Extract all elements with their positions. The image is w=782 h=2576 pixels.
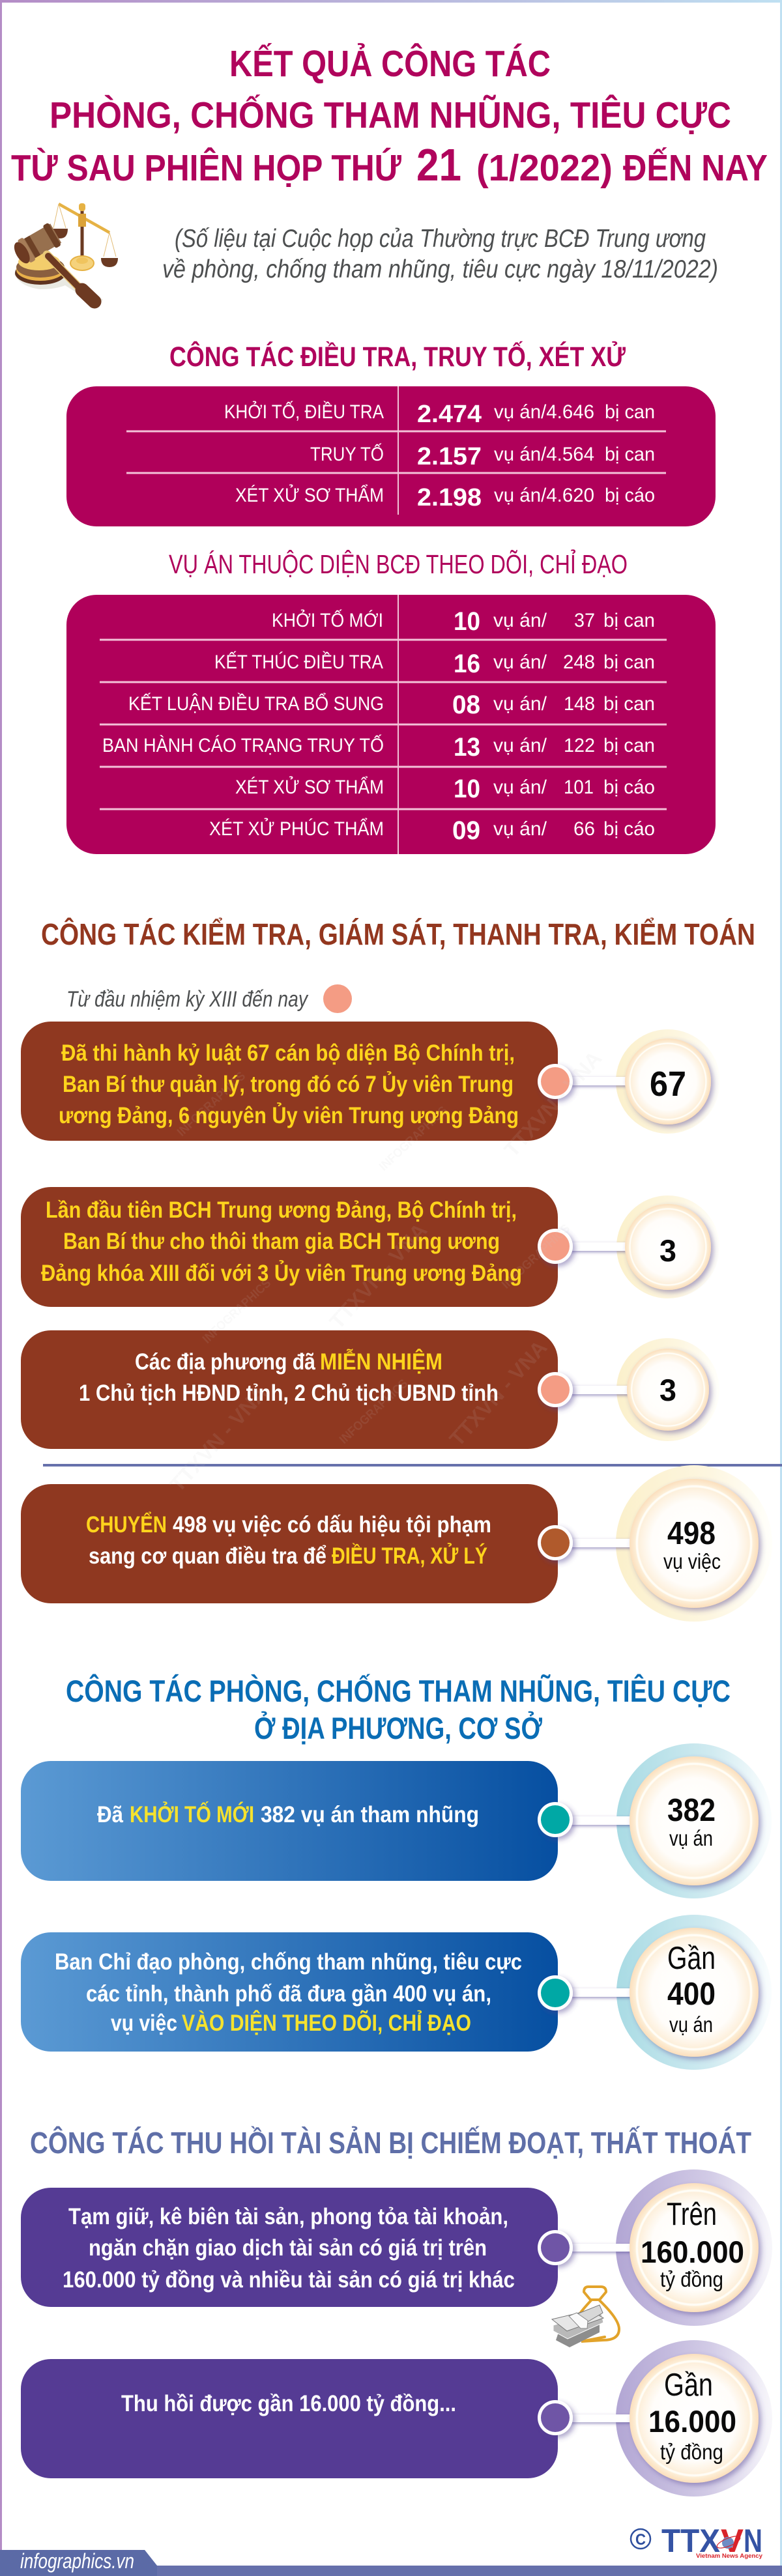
- row 4: bị can: [603, 735, 655, 756]
- icon: money bag and cash: [552, 2287, 619, 2347]
- card: discipline 67: 67: [650, 1065, 686, 1104]
- card: monitored 400: vụ việc: [111, 2011, 177, 2036]
- card: local dismissal 3: 1 Chủ tịch HĐND tỉnh, 2 Chủ tịch UBND tỉnh: [79, 1381, 499, 1406]
- panel: investigation table: [66, 386, 716, 526]
- logo: TTXVN: Vietnam News Agency: [696, 2553, 763, 2560]
- row: truy to: vụ án/4.564: [494, 444, 594, 465]
- card: asset seizure 160.000: Tạm giữ, kê biên tài sản, phong tỏa tài khoản,: [68, 2204, 508, 2229]
- row: xet xu: vụ án/4.620: [494, 485, 594, 506]
- row: xet xu: XÉT XỬ SƠ THẨM: [235, 484, 384, 506]
- title: TỪ SAU PHIÊN HỌP THỨ: [11, 147, 402, 189]
- row 6: bị cáo: [603, 818, 655, 840]
- card: asset seizure 160.000: 160.000: [641, 2235, 744, 2269]
- row 6: XÉT XỬ PHÚC THẨM: [209, 818, 384, 840]
- card: recovered 16.000: Gần: [664, 2368, 713, 2403]
- title: 21: [416, 139, 461, 190]
- row 2: KẾT THÚC ĐIỀU TRA: [214, 651, 383, 673]
- row: xet xu: [235, 484, 655, 511]
- card: new prosecutions 382: 382 vụ án tham nhũng: [261, 1802, 479, 1827]
- row 6: 66: [573, 818, 595, 840]
- row 6: vụ án/: [493, 818, 547, 840]
- card: recovered 16.000: tỷ đồng: [660, 2440, 723, 2464]
- subtitle note: [162, 225, 718, 283]
- row 2: vụ án/: [493, 651, 547, 673]
- row: xet xu: bị cáo: [605, 485, 655, 506]
- card: monitored 400: [21, 1915, 772, 2070]
- row 3: KẾT LUẬN ĐIỀU TRA BỔ SUNG: [128, 693, 384, 715]
- row 3: 08: [452, 691, 480, 719]
- card: new prosecutions 382: 382: [667, 1793, 716, 1828]
- watermarks: INFOGRAPHICS: [175, 1069, 248, 1139]
- subtitle note: về phòng, chống tham nhũng, tiêu cực ngày 18/11/2022): [162, 255, 718, 283]
- logo: TTXVN: N: [744, 2523, 762, 2559]
- card: local dismissal 3: [21, 1330, 719, 1449]
- heading: local prevention: Ở ĐỊA PHƯƠNG, CƠ SỞ: [254, 1711, 543, 1745]
- card: new prosecutions 382: KHỞI TỐ MỚI: [130, 1801, 254, 1827]
- row 3: 148: [564, 693, 595, 715]
- row: khoi to: bị can: [605, 401, 655, 423]
- row 2: bị can: [603, 651, 655, 673]
- row 2: 248: [563, 651, 595, 673]
- row: khoi to: KHỞI TỐ, ĐIỀU TRA: [224, 401, 384, 423]
- card: monitored 400: Gần: [667, 1941, 716, 1976]
- panel: monitored cases table: [66, 595, 716, 854]
- card: transfer 498: ĐIỀU TRA, XỬ LÝ: [332, 1543, 487, 1569]
- card: monitored 400: 400: [667, 1977, 716, 2012]
- logo: TTXVN: [631, 2523, 763, 2560]
- card: transfer 498: sang cơ quan điều tra để: [89, 1543, 326, 1569]
- row 5: XÉT XỬ SƠ THẨM: [235, 776, 384, 798]
- row 4: [102, 733, 655, 762]
- watermarks: TTXVN - VNA: [444, 1336, 551, 1451]
- row 6: [209, 816, 655, 845]
- logo: TTXVN: TTX: [661, 2523, 720, 2559]
- row 5: bị cáo: [603, 777, 655, 798]
- watermarks: TTXVN - VNA: [165, 1381, 272, 1496]
- row 4: 122: [564, 735, 595, 756]
- row: truy to: bị can: [605, 444, 655, 465]
- card: local dismissal 3: MIỄN NHIỆM: [320, 1349, 442, 1375]
- title: [11, 42, 768, 190]
- card: monitored 400: Ban Chỉ đạo phòng, chống tham nhũng, tiêu cực: [55, 1949, 522, 1975]
- heading: investigation: CÔNG TÁC ĐIỀU TRA, TRUY TỐ, XÉT XỬ: [169, 341, 626, 373]
- card: discipline 67: [21, 1022, 720, 1141]
- row 1: KHỞI TỐ MỚI: [272, 609, 383, 631]
- row 5: 101: [564, 777, 594, 798]
- row 5: vụ án/: [493, 777, 547, 798]
- logo: TTXVN: C: [635, 2531, 646, 2549]
- card: new prosecutions 382: vụ án: [669, 1826, 713, 1850]
- card: monitored 400: các tỉnh, thành phố đã đưa gần 400 vụ án,: [86, 1981, 491, 2007]
- row 6: 09: [452, 816, 480, 845]
- card: discipline 67: Ban Bí thư quản lý, trong đó có 7 Ủy viên Trung: [63, 1071, 514, 1097]
- heading: monitored cases: VỤ ÁN THUỘC DIỆN BCĐ THEO DÕI, CHỈ ĐẠO: [169, 549, 628, 579]
- watermarks: INFOGRAPHICS: [337, 1377, 411, 1447]
- card: removed from central committee 3: Đảng khóa XIII đối với 3 Ủy viên Trung ương Đảng: [41, 1260, 522, 1286]
- row 3: bị can: [603, 693, 655, 715]
- row: khoi to: 2.474: [417, 401, 482, 428]
- logo: TTXVN: V: [721, 2523, 744, 2559]
- divider: [43, 1464, 782, 1467]
- row: truy to: [310, 443, 655, 470]
- card: recovered 16.000: 16.000: [648, 2404, 736, 2439]
- card: removed from central committee 3: [21, 1187, 719, 1307]
- icon: gavel and scales: [10, 203, 118, 306]
- title: KẾT QUẢ CÔNG TÁC: [229, 42, 551, 85]
- legend note: Từ đầu nhiệm kỳ XIII đến nay: [66, 987, 309, 1012]
- row 2: [214, 650, 655, 678]
- watermarks: INFOGRAPHICS: [377, 1104, 450, 1174]
- row 1: 37: [574, 610, 595, 631]
- card: recovered 16.000: Thu hồi được gần 16.000 tỷ đồng...: [121, 2391, 456, 2416]
- card: asset seizure 160.000: tỷ đồng: [660, 2267, 723, 2291]
- row 1: vụ án/: [493, 610, 547, 631]
- card: local dismissal 3: 3: [659, 1373, 676, 1407]
- card: removed from central committee 3: 3: [659, 1233, 676, 1268]
- row 1: [272, 607, 655, 636]
- row 2: 16: [454, 650, 480, 678]
- card: transfer 498: 498 vụ việc có dấu hiệu tội phạm: [173, 1512, 491, 1538]
- card: asset seizure 160.000: Trên: [667, 2197, 717, 2232]
- row 5: 10: [454, 775, 480, 803]
- row 4: vụ án/: [493, 735, 547, 756]
- watermarks: TTXVN - VNA: [325, 1218, 431, 1334]
- card: local dismissal 3: Các địa phương đã: [135, 1349, 315, 1375]
- card: discipline 67: Đã thi hành kỷ luật 67 cán bộ diện Bộ Chính trị,: [61, 1040, 515, 1066]
- row: khoi to: vụ án/4.646: [494, 401, 594, 423]
- row 3: [128, 691, 655, 719]
- row 4: 13: [454, 733, 480, 762]
- row 4: BAN HÀNH CÁO TRẠNG TRUY TỐ: [102, 734, 384, 756]
- title: ĐẾN NAY: [623, 147, 768, 189]
- card: monitored 400: vụ án: [669, 2012, 713, 2037]
- card: new prosecutions 382: [21, 1743, 772, 1898]
- title: (1/2022): [476, 147, 613, 189]
- card: transfer 498: vụ việc: [663, 1549, 721, 1573]
- card: asset seizure 160.000: ngăn chặn giao dịch tài sản có giá trị trên: [89, 2235, 487, 2261]
- card: recovered 16.000: [21, 2340, 772, 2497]
- card: monitored 400: VÀO DIỆN THEO DÕI, CHỈ ĐẠO: [182, 2010, 471, 2036]
- footer bar: infographics.vn: [20, 2549, 134, 2573]
- footer bar: [0, 2549, 782, 2576]
- watermarks: INFOGRAPHICS: [499, 1222, 573, 1292]
- card: asset seizure 160.000: 160.000 tỷ đồng và nhiều tài sản có giá trị khác: [63, 2267, 515, 2293]
- card: transfer 498: [21, 1465, 772, 1622]
- watermarks: [165, 1046, 606, 1496]
- row 5: [235, 775, 655, 803]
- row 1: 10: [454, 607, 480, 636]
- row: truy to: 2.157: [417, 443, 482, 470]
- card: transfer 498: CHUYỂN: [86, 1511, 167, 1538]
- row 3: vụ án/: [493, 693, 547, 715]
- card: asset seizure 160.000: [21, 2169, 772, 2326]
- heading: local prevention: [66, 1674, 731, 1745]
- row: truy to: TRUY TỐ: [310, 443, 384, 465]
- card: new prosecutions 382: Đã: [97, 1802, 123, 1827]
- row 1: bị can: [603, 610, 655, 631]
- row: xet xu: 2.198: [417, 484, 482, 511]
- card: removed from central committee 3: Ban Bí thư cho thôi tham gia BCH Trung ương: [63, 1229, 500, 1254]
- card: removed from central committee 3: Lần đầu tiên BCH Trung ương Đảng, Bộ Chính trị,: [46, 1197, 517, 1223]
- row: khoi to: [224, 401, 655, 428]
- watermarks: INFOGRAPHICS: [200, 1276, 274, 1347]
- card: discipline 67: ương Đảng, 6 nguyên Ủy viên Trung ương Đảng: [59, 1102, 519, 1128]
- watermarks: TTXVN - VNA: [499, 1046, 606, 1162]
- card: transfer 498: 498: [667, 1516, 716, 1551]
